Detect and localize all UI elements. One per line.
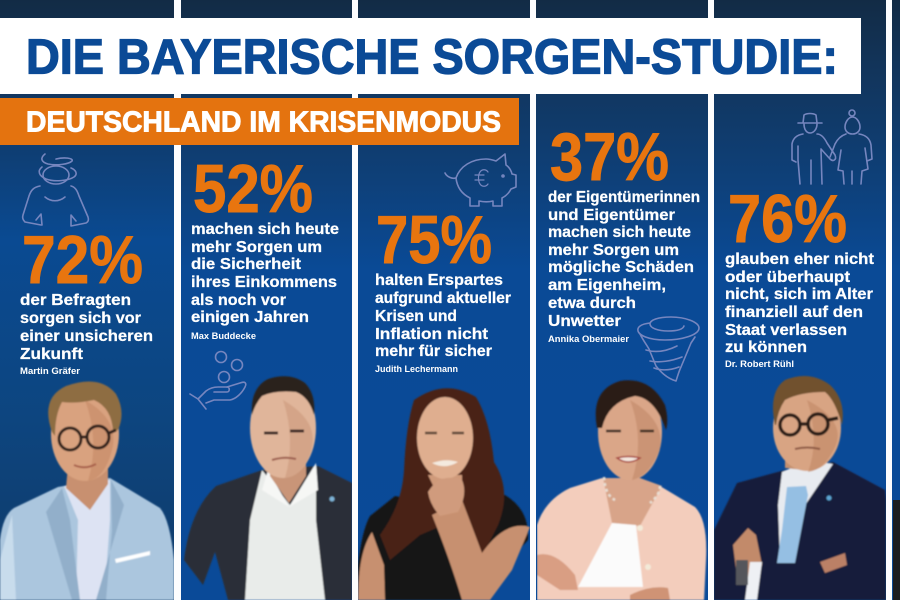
icon: hand with coins [190,352,246,409]
icon: worried person [23,154,88,226]
text: 37% description: und Eigentümer [548,207,675,224]
stat: 75%: 75% [376,202,492,278]
text: 52% description: als noch vor [191,292,286,309]
text: 76% description: zu können [725,339,807,356]
text: 75% description [375,272,511,360]
stat: 52%: 52% [193,151,313,227]
text: 37% description: am Eigenheim, [548,277,666,294]
text: 72% description: sorgen sich vor [20,310,141,327]
text: 75% description: Krisen und [375,308,457,325]
panel: column 2 statistic [190,151,339,409]
text: 52% description: ihres Einkommens [191,274,337,291]
panel: column 4 statistic [548,119,700,381]
text: 76% description: finanziell auf den [725,304,863,321]
text: 37% description: mehr Sorgen um [548,242,679,259]
subtitle banner: DEUTSCHLAND IM KRISENMODUS [26,106,501,138]
text: 37% description: machen sich heute [548,224,691,241]
panel: column 3 statistic [375,154,516,374]
text: 72% description: einer unsicheren [20,328,153,345]
portrait: Martin Gräfer [0,382,174,600]
stat: 37%: 37% [550,119,669,195]
text: 72% description: Zukunft [20,346,83,363]
portrait: Max Buddecke [184,376,352,600]
text: 37% description [548,189,700,330]
text: 76% description: Staat verlassen [725,322,847,339]
name: Annika Obermaier: Annika Obermaier [548,334,630,344]
text: 75% description: halten Erspartes [375,272,503,289]
text: 75% description: mehr für sicher [375,343,492,360]
text: 37% description: mögliche Schäden [548,259,694,276]
icon: elderly couple [792,110,872,184]
text: 76% description [725,251,874,356]
text: 52% description: die Sicherheit [191,256,301,273]
text: 76% description: nicht, sich im Alter [725,286,873,303]
icon: tornado [638,317,699,381]
text: 37% description: etwa durch [548,295,636,312]
stat: 72%: 72% [22,222,143,298]
panel: column 1 statistic [20,154,153,376]
text: 37% description: Unwetter [548,313,621,330]
subtitle banner [0,98,519,145]
icon: piggy bank [445,154,516,206]
text: 76% description: glauben eher nicht [725,251,874,268]
text: 37% description: der Eigentümerinnen [548,189,700,206]
text: 72% description: der Befragten [20,292,131,309]
text: 52% description: einigen Jahren [191,309,309,326]
portrait: Judith Lechermann [358,388,530,600]
title banner [0,18,861,94]
name: Dr. Robert Rühl: Dr. Robert Rühl [725,359,794,369]
name: Max Buddecke: Max Buddecke [191,331,256,341]
panel: column 5 statistic [725,110,874,369]
text: 52% description [191,221,339,326]
text: 72% description [20,292,153,363]
text: 52% description: machen sich heute [191,221,339,238]
name: Judith Lechermann: Judith Lechermann [375,364,458,374]
name: Martin Gräfer: Martin Gräfer [20,366,81,376]
portrait: Annika Obermaier [537,380,706,600]
title banner: DIE BAYERISCHE SORGEN-STUDIE: [26,30,838,84]
text: 76% description: oder überhaupt [725,269,850,286]
stat: 76%: 76% [728,181,847,257]
portrait: Dr. Robert Rühl [714,376,886,600]
text: 75% description: aufgrund aktueller [375,290,511,307]
text: 52% description: mehr Sorgen um [191,239,322,256]
text: 75% description: Inflation nicht [375,326,488,343]
